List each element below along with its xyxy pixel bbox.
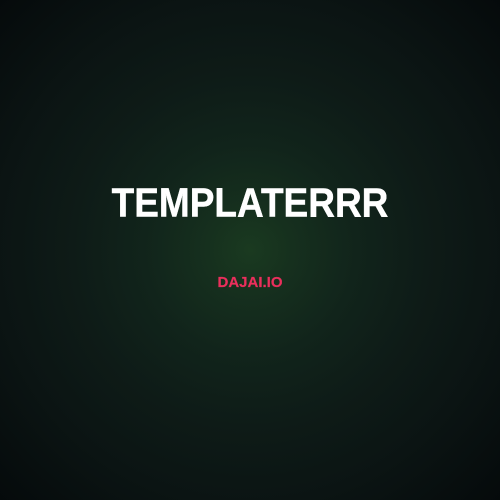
subtitle: brand name: DAJAI.IO [217,274,282,291]
title: TEMPLATERRR [112,179,388,225]
